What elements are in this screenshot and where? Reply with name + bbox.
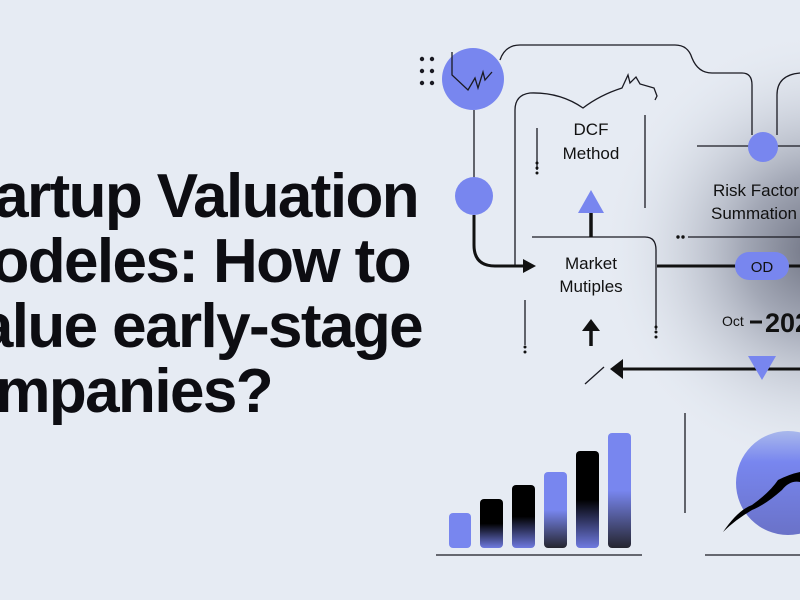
arrow up small — [582, 319, 600, 346]
DCF Method text: DCF — [574, 120, 608, 139]
date: Oct — [722, 313, 744, 329]
date — [722, 308, 800, 338]
OD pill connector: OD — [751, 259, 773, 276]
OD pill connector — [657, 252, 800, 280]
arrow to market box — [474, 215, 536, 273]
diagram: Mutiples — [559, 277, 623, 296]
diagram: Method — [563, 144, 619, 163]
circle node right — [748, 132, 778, 162]
Risk Factor Summation text: Risk Factor — [713, 181, 799, 200]
Market Multiples text: Market — [565, 254, 617, 273]
arrow up to DCF — [578, 190, 604, 237]
node circle — [455, 177, 493, 215]
icon: dots grid — [420, 57, 434, 85]
icon: big circle with zigzag — [442, 48, 504, 110]
bar chart — [449, 433, 631, 548]
icon: circle with swoosh — [723, 431, 800, 535]
arrow left — [610, 356, 800, 380]
diagram: Summation — [711, 204, 797, 223]
